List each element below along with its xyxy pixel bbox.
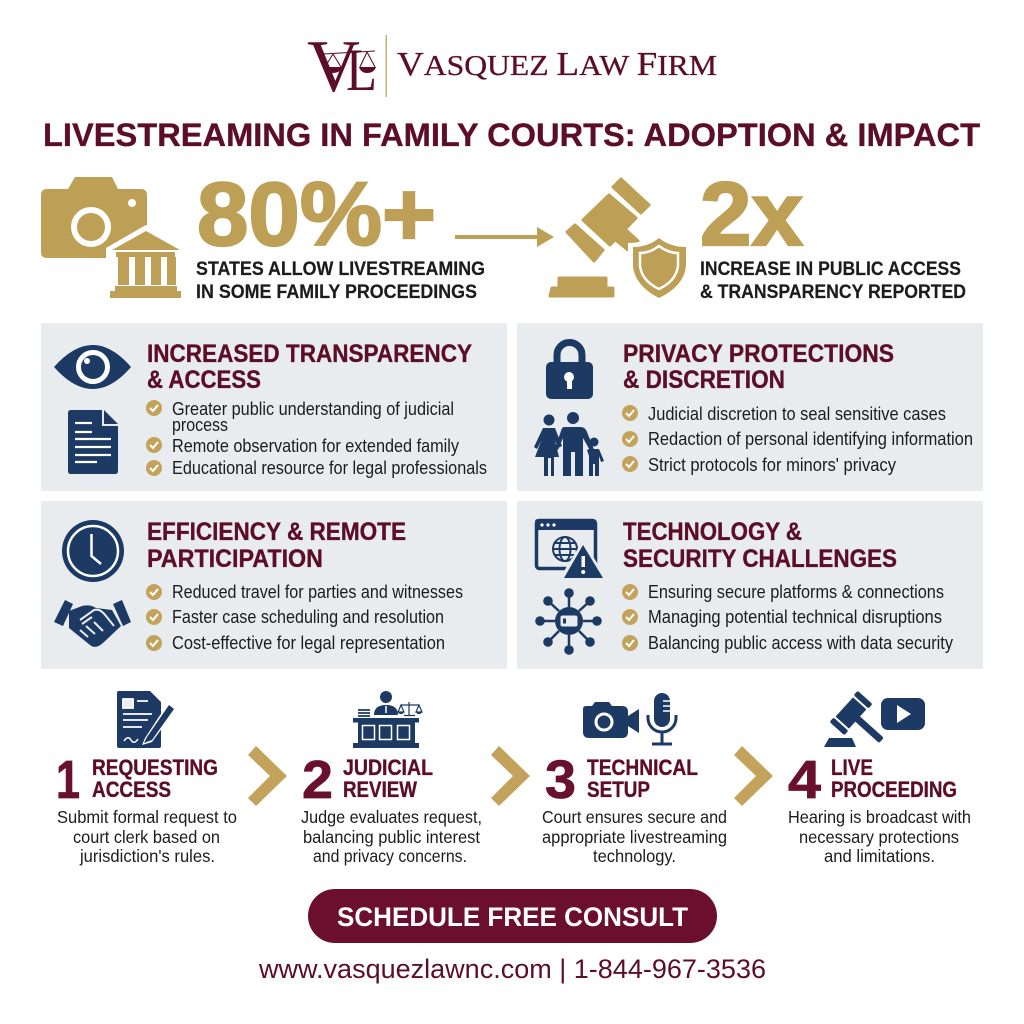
- stat caption: states: IN SOME FAMILY PROCEEDINGS: [196, 281, 477, 303]
- step description: court clerk based on: [73, 827, 220, 847]
- icon: judge at bench: [353, 691, 422, 748]
- number: 3: [545, 750, 576, 810]
- step description: jurisdiction's rules.: [79, 846, 215, 866]
- bullet list: [622, 581, 954, 653]
- step 4: live proceeding: [788, 691, 971, 866]
- step heading: [92, 755, 218, 802]
- step heading: SETUP: [587, 777, 650, 802]
- bullet list: Remote observation for extended family: [172, 435, 460, 456]
- logo wordmark: VASQUEZ LAW FIRM: [397, 46, 717, 83]
- step description: [542, 807, 727, 866]
- stat caption: access: INCREASE IN PUBLIC ACCESS: [700, 258, 961, 280]
- chevron arrow 3: [734, 746, 773, 806]
- chevron arrow 2: [491, 746, 530, 806]
- bullet list: [146, 581, 463, 653]
- icon: gavel and play button: [824, 691, 925, 756]
- heading: INCREASED TRANSPARENCY: [147, 340, 472, 368]
- step description: Judge evaluates request,: [301, 807, 482, 827]
- step description: Hearing is broadcast with: [788, 807, 971, 827]
- step heading: LIVE: [831, 755, 873, 780]
- heading: EFFICIENCY & REMOTE: [147, 518, 406, 546]
- bullet list: Redaction of personal identifying information: [648, 428, 973, 449]
- number: 4: [788, 750, 821, 810]
- bullet list: Faster case scheduling and resolution: [172, 606, 444, 627]
- stat caption: access: [700, 258, 966, 303]
- step description: and limitations.: [824, 846, 935, 866]
- panel: efficiency: [41, 501, 507, 669]
- icon: network: [535, 588, 602, 655]
- icon: family: [534, 412, 604, 476]
- arrow: [455, 227, 554, 247]
- stat caption: states: STATES ALLOW LIVESTREAMING: [196, 258, 485, 280]
- step description: [788, 807, 971, 866]
- logo: Vasquez Law Firm: [307, 26, 717, 108]
- heading: [623, 340, 894, 394]
- call to action button: SCHEDULE FREE CONSULT: [337, 902, 688, 932]
- call to action button: [308, 889, 717, 943]
- logo monogram: L: [346, 37, 377, 103]
- panel: privacy protections: [517, 323, 983, 491]
- step description: Court ensures secure and: [542, 807, 727, 827]
- bullet list: process: [172, 414, 228, 435]
- chevron arrow 1: [248, 746, 287, 806]
- icon: camera and courthouse: [41, 177, 190, 304]
- step 2: judicial review: [301, 691, 482, 866]
- icon: browser with warning: [535, 519, 608, 581]
- bullet list: Greater public understanding of judicial: [172, 398, 454, 419]
- step description: [301, 807, 482, 866]
- step description: and privacy concerns.: [313, 846, 467, 866]
- bullet list: Strict protocols for minors' privacy: [648, 454, 897, 475]
- contact line: www.vasquezlawnc.com | 1-844-967-3536: [258, 954, 766, 984]
- step description: technology.: [593, 846, 676, 866]
- step 3: technical setup: [542, 693, 727, 866]
- icon: signed form: [117, 691, 176, 748]
- step description: Submit formal request to: [57, 807, 237, 827]
- panel: increased transparency: [41, 323, 507, 491]
- step heading: [587, 755, 698, 802]
- stat: 80%+: 80%+: [197, 165, 436, 265]
- logo monogram: V: [307, 26, 360, 108]
- heading: & DISCRETION: [623, 366, 785, 394]
- heading: PRIVACY PROTECTIONS: [623, 340, 894, 368]
- bullet list: [622, 403, 973, 475]
- title: LIVESTREAMING IN FAMILY COURTS: ADOPTION & IMPACT: [43, 117, 980, 153]
- step heading: PROCEEDING: [831, 777, 957, 802]
- step heading: TECHNICAL: [587, 755, 698, 780]
- icon: padlock: [546, 342, 593, 399]
- stat: 2x: 2x: [700, 165, 803, 265]
- icon: camera and microphone: [583, 693, 676, 744]
- step description: balancing public interest: [303, 827, 480, 847]
- step heading: ACCESS: [92, 777, 171, 802]
- step heading: [343, 755, 433, 802]
- bullet list: Balancing public access with data security: [648, 632, 954, 653]
- heading: & ACCESS: [147, 366, 261, 394]
- step heading: JUDICIAL: [343, 755, 433, 780]
- step heading: [831, 755, 957, 802]
- number: 1: [56, 750, 80, 810]
- panel: technology: [517, 501, 983, 669]
- icon: handshake: [54, 600, 131, 647]
- number: 2: [302, 750, 333, 810]
- bullet list: Reduced travel for parties and witnesses: [172, 581, 463, 602]
- step description: [57, 807, 237, 866]
- step 1: requesting access: [56, 691, 237, 866]
- icon: eye: [54, 345, 131, 389]
- bullet list: Managing potential technical disruptions: [648, 606, 942, 627]
- icon: document: [68, 410, 118, 474]
- bullet list: [146, 398, 487, 478]
- stat caption: access: & TRANSPARENCY REPORTED: [700, 281, 966, 303]
- heading: PARTICIPATION: [147, 545, 323, 573]
- icon: gavel and shield: [550, 179, 690, 302]
- bullet list: Judicial discretion to seal sensitive cases: [648, 403, 946, 424]
- step heading: REQUESTING: [92, 755, 218, 780]
- stat caption: states: [196, 258, 485, 303]
- heading: SECURITY CHALLENGES: [623, 545, 897, 573]
- bullet list: Ensuring secure platforms & connections: [648, 581, 944, 602]
- heading: [623, 518, 897, 573]
- heading: [147, 518, 406, 573]
- heading: [147, 340, 472, 394]
- step description: appropriate livestreaming: [542, 827, 727, 847]
- step heading: REVIEW: [343, 777, 417, 802]
- icon: clock: [62, 520, 124, 582]
- bullet list: Cost-effective for legal representation: [172, 632, 445, 653]
- heading: TECHNOLOGY &: [623, 518, 802, 546]
- step description: necessary protections: [799, 827, 959, 847]
- bullet list: Educational resource for legal professionals: [172, 457, 487, 478]
